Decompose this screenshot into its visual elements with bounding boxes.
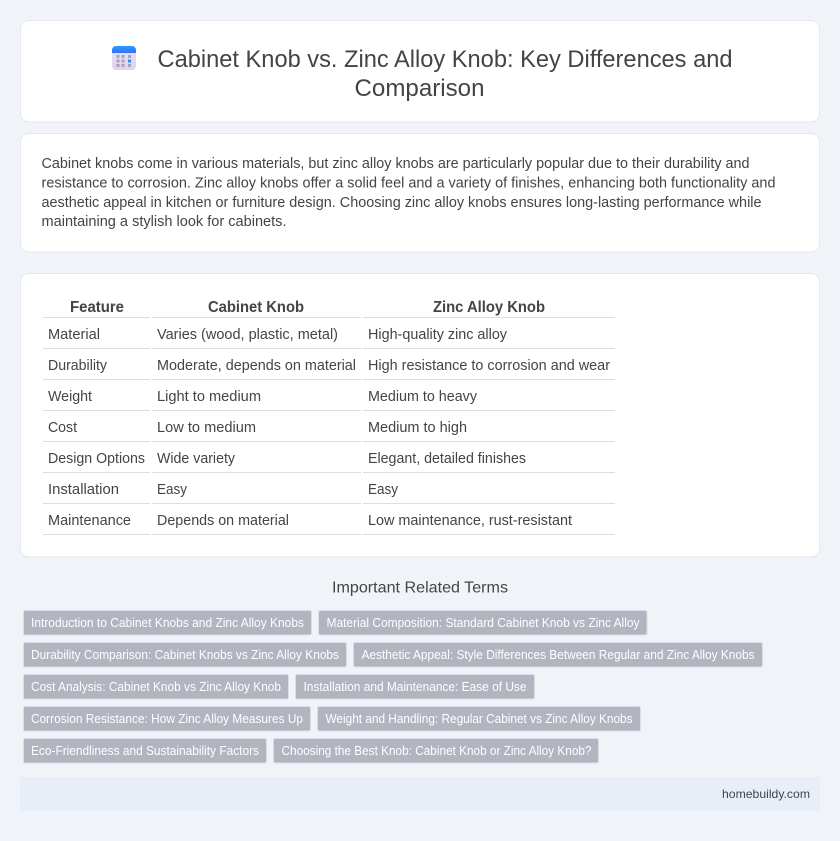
table header row: Cabinet Knob [208, 299, 304, 316]
tag: installation and maintenance: Installation and Maintenance: Ease of Use [304, 680, 527, 694]
heading: important related terms: Important Related Terms [332, 580, 508, 596]
icon: calendar [112, 46, 136, 70]
row: durability: Moderate, depends on material [157, 358, 356, 374]
title: Cabinet Knob vs. Zinc Alloy Knob: Key Differences and [158, 46, 732, 73]
row: material: Material [48, 327, 100, 343]
row: maintenance: Low maintenance, rust-resistant [368, 513, 572, 529]
row: design options: Elegant, detailed finishes [368, 451, 526, 467]
table header row: Zinc Alloy Knob [433, 299, 545, 316]
tag: installation and maintenance [296, 674, 534, 699]
tag: durability comparison: Durability Comparison: Cabinet Knobs vs Zinc Alloy Knobs [31, 648, 339, 662]
row: maintenance [48, 513, 572, 529]
row: installation: Easy [157, 482, 188, 498]
tag: weight and handling: Weight and Handling: Regular Cabinet vs Zinc Alloy Knobs [326, 712, 632, 726]
row: cost: Medium to high [368, 420, 467, 436]
tag: eco-friendliness [24, 738, 266, 763]
row: weight: Medium to heavy [368, 389, 478, 405]
row: durability: Durability [48, 358, 108, 374]
tag: material composition [318, 610, 647, 635]
tag: corrosion resistance [24, 706, 310, 731]
table header row: Feature [70, 299, 124, 316]
row: maintenance: Maintenance [48, 513, 131, 529]
panel: intro paragraph: Cabinet knobs come in various materials, but zinc alloy knobs are particularly popular due to their durability and [42, 156, 750, 172]
row: weight: Light to medium [157, 389, 261, 405]
footer [20, 777, 820, 811]
related terms tags [24, 610, 762, 763]
panel: comparison table [20, 274, 820, 557]
tag: introduction: Introduction to Cabinet Knobs and Zinc Alloy Knobs [31, 616, 304, 630]
row: cost [48, 420, 467, 436]
row: cost: Low to medium [157, 420, 256, 436]
panel: intro paragraph: resistance to corrosion. Zinc alloy knobs offer a solid feel and a variety of finishes, enhancing both functionality and [42, 176, 776, 192]
row: design options: Wide variety [157, 451, 236, 467]
tag: weight and handling [318, 706, 640, 731]
panel: intro paragraph: maintaining a stylish look for cabinets. [42, 214, 286, 230]
title [158, 46, 732, 102]
row: weight [48, 389, 478, 405]
tag: durability comparison [24, 642, 346, 667]
tag: aesthetic appeal [354, 642, 762, 667]
row: weight: Weight [48, 389, 92, 405]
row: material: High-quality zinc alloy [368, 327, 508, 343]
row: installation: Easy [368, 482, 399, 498]
row: durability: High resistance to corrosion and wear [368, 358, 610, 374]
table header row [70, 299, 545, 316]
header panel [20, 20, 820, 122]
row: material [48, 327, 508, 343]
row: maintenance: Depends on material [157, 513, 289, 529]
tag: choosing the best knob [274, 738, 598, 763]
row: design options [48, 451, 526, 467]
tag: cost analysis [24, 674, 288, 699]
row: installation [48, 482, 399, 498]
footer: homebuildy.com [722, 787, 810, 801]
tag: material composition: Material Composition: Standard Cabinet Knob vs Zinc Alloy [326, 616, 640, 630]
row: design options: Design Options [48, 451, 145, 467]
tag: introduction [24, 610, 312, 635]
tag: corrosion resistance: Corrosion Resistance: How Zinc Alloy Measures Up [31, 712, 303, 726]
tag: choosing the best knob: Choosing the Best Knob: Cabinet Knob or Zinc Alloy Knob? [282, 744, 592, 758]
row: material: Varies (wood, plastic, metal) [157, 327, 338, 343]
panel: intro paragraph: aesthetic appeal in kitchen or furniture design. Choosing zinc alloy knobs ensures long-lasting performance while [42, 195, 762, 211]
panel: intro paragraph [20, 134, 820, 252]
title: Comparison [354, 75, 484, 102]
tag: eco-friendliness: Eco-Friendliness and Sustainability Factors [31, 744, 259, 758]
tag: aesthetic appeal: Aesthetic Appeal: Style Differences Between Regular and Zinc Alloy Knobs [362, 648, 754, 662]
row: cost: Cost [48, 420, 77, 436]
tag: cost analysis: Cost Analysis: Cabinet Knob vs Zinc Alloy Knob [31, 680, 281, 694]
row: installation: Installation [48, 482, 119, 498]
row: durability [48, 358, 610, 374]
